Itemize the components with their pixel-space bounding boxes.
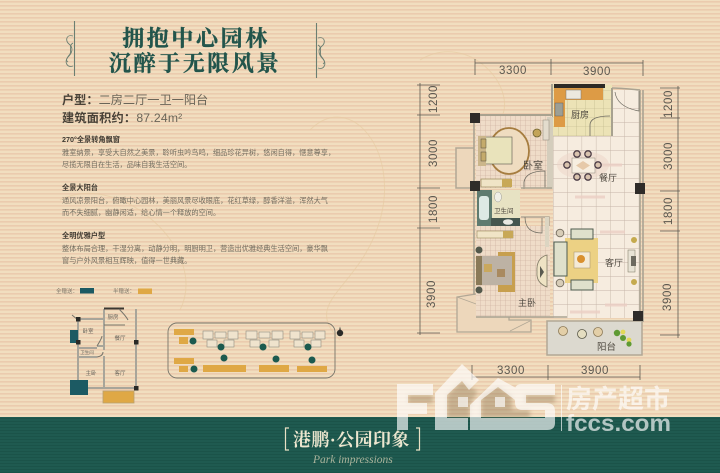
wardrobe	[481, 179, 511, 187]
bedroom	[476, 115, 553, 189]
feature 3	[62, 231, 328, 265]
dining set	[557, 151, 609, 180]
logo mark	[397, 384, 433, 430]
logo domain: fccs.com	[566, 410, 671, 436]
dimension labels: 1200	[663, 90, 675, 118]
tv cabinet	[537, 255, 547, 287]
tv wall	[628, 237, 637, 285]
feature 1: 尽揽无限自在生活，品味自我生活空间。	[62, 160, 191, 169]
dimension labels: 3900	[581, 365, 609, 377]
small key plan: 主卧	[85, 369, 97, 377]
floor area: 建筑面积约：87.24m²	[62, 110, 182, 125]
feature 2	[62, 183, 328, 217]
dimension labels: 1200	[428, 85, 440, 113]
armchair	[533, 120, 549, 140]
kitchen	[552, 84, 612, 136]
ornament right	[316, 23, 325, 78]
unit type: 户型：二房二厅一卫一阳台	[62, 92, 208, 107]
legend	[56, 287, 152, 295]
dimension labels: 3900	[426, 280, 438, 308]
small key plan	[70, 308, 138, 403]
feature 1: 270°全景转角飘窗	[62, 135, 120, 144]
title block	[109, 26, 281, 76]
logo Chinese text: 房产超市	[566, 384, 670, 414]
dimension labels: 3900	[662, 283, 674, 311]
bed	[476, 246, 515, 294]
title: 拥抱中心园林	[122, 26, 270, 51]
feature text	[62, 135, 335, 265]
dimensions	[417, 59, 680, 380]
bathroom	[477, 190, 520, 226]
slogan script: Park impressions	[312, 454, 393, 466]
living room label: 客厅	[605, 257, 623, 268]
dining label: 餐厅	[599, 172, 617, 183]
project name: 港鹏·公园印象	[293, 430, 410, 450]
living and dining floor	[553, 136, 640, 318]
subtitle: 沉醉于无限风景	[109, 51, 281, 76]
variant A	[174, 329, 196, 344]
pillars	[470, 113, 645, 321]
plants	[614, 330, 632, 347]
label: 主卧	[518, 297, 536, 308]
small key plan: 餐厅	[114, 334, 126, 342]
dimension labels	[426, 65, 675, 377]
unit info	[62, 92, 208, 125]
living room set	[554, 229, 598, 290]
feature 2: 通风凉景阳台，俯瞰中心园林，美丽风景尽收眼底，花红草绿，醇香洋溢，浑然大气	[62, 196, 328, 205]
wardrobe	[477, 231, 513, 238]
feature 2: 全景大阳台	[62, 183, 98, 192]
feature 2: 而不失细腻，幽静闲适，给心情一个释放的空间。	[62, 208, 220, 217]
ornament left	[66, 21, 74, 76]
dimension labels: 1800	[428, 195, 440, 223]
feature 1: 雅室纳景，享受大自然之美景，聆听虫吟鸟鸣，细品珍花异树，悠闲自得，惬意尊享，	[62, 148, 335, 157]
feature 3: 整体布局合理，干湿分离，动静分明，明厨明卫，营造出优雅经典生活空间，豪华飘	[62, 244, 328, 253]
label: 阳台	[597, 341, 616, 353]
logo shadow	[408, 381, 555, 418]
label: 卫生间	[494, 206, 514, 215]
dimension labels: 3900	[583, 66, 611, 78]
feature 3: 全明优雅户型	[62, 231, 105, 240]
variant E	[174, 358, 198, 372]
bed	[478, 128, 529, 174]
icon: compass	[337, 326, 343, 336]
feature 1	[62, 135, 335, 169]
variants F G H	[203, 365, 327, 372]
lower left balcony	[457, 294, 531, 332]
floor plan	[456, 84, 645, 355]
dimension labels: 3300	[499, 65, 527, 77]
small key plan: 卧室	[82, 327, 94, 335]
legend: 半赠送：	[113, 287, 135, 295]
label: 卧室	[523, 159, 543, 172]
dimension labels: 3000	[663, 142, 675, 170]
front balcony	[547, 321, 642, 355]
small key plan: 客厅	[114, 369, 126, 377]
master bedroom	[476, 217, 550, 317]
dimension labels: 3300	[497, 365, 525, 377]
dimension labels: 3000	[428, 139, 440, 167]
feature 3: 窗与户外风景相互辉映，值得一世典藏。	[62, 256, 191, 265]
label: 厨房	[571, 109, 589, 120]
small key plan: 厨房	[107, 313, 119, 321]
left balcony	[456, 148, 474, 188]
walls	[474, 88, 643, 322]
variants B C D	[203, 331, 325, 347]
watermark logo	[397, 364, 671, 436]
unit variants box	[168, 323, 335, 378]
legend: 全赠送：	[56, 287, 78, 295]
bottom band	[0, 417, 720, 473]
small key plan: 卫生间	[80, 349, 94, 356]
dimension labels: 1800	[663, 197, 675, 225]
